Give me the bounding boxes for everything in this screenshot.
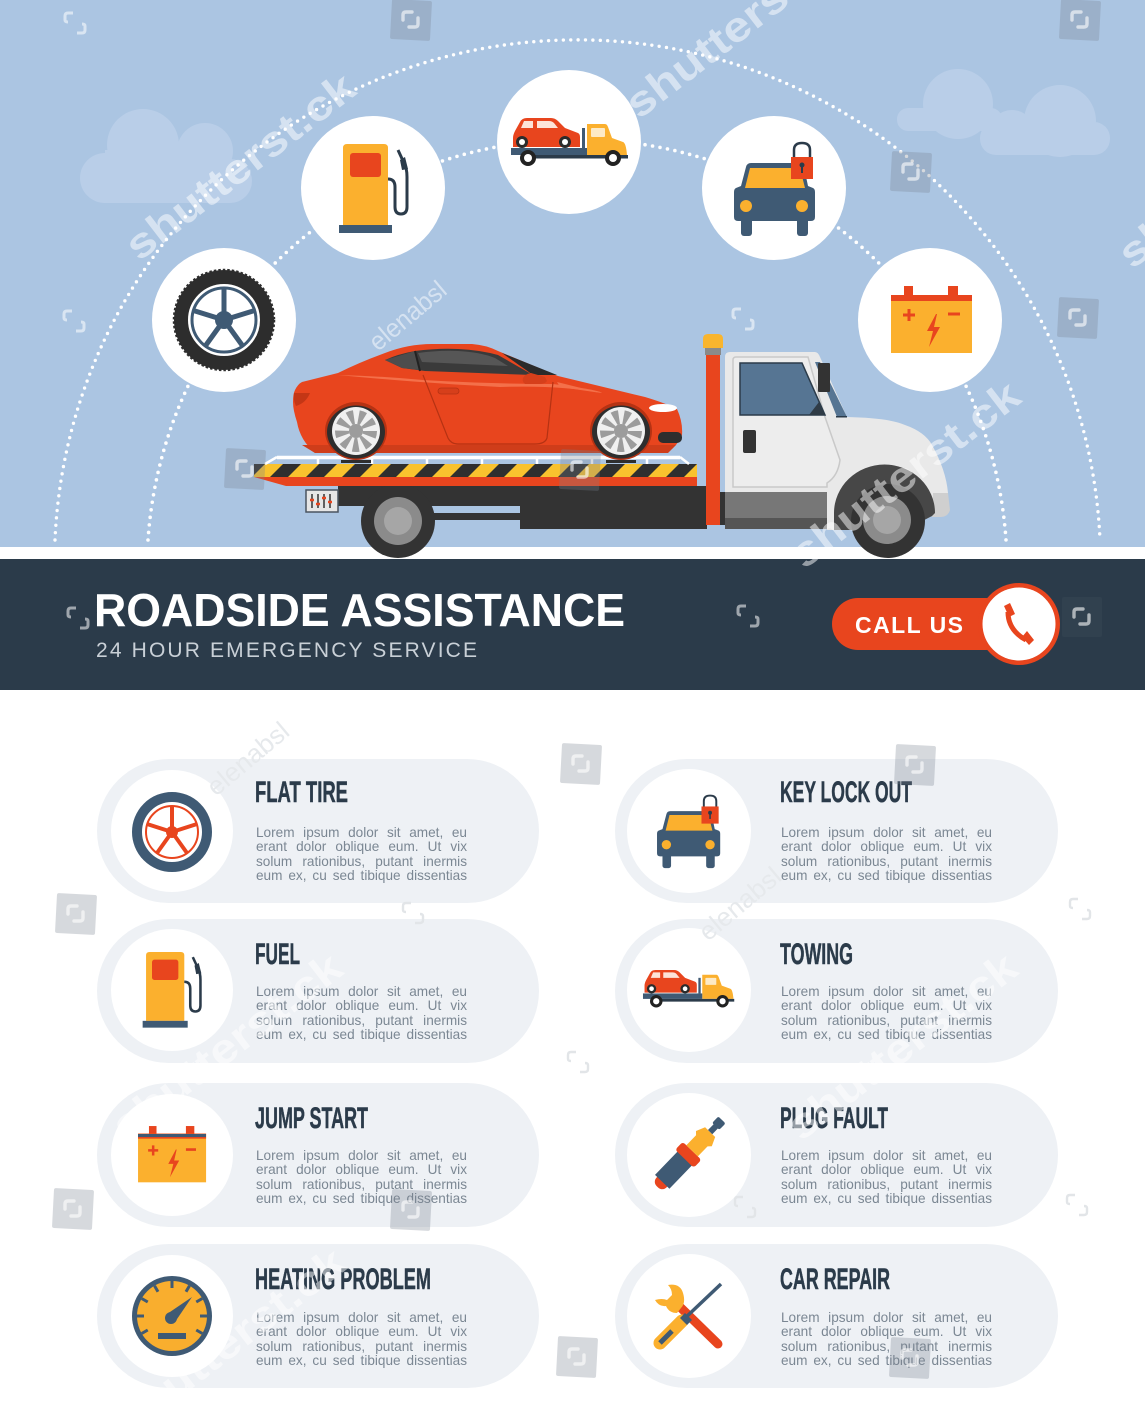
call us button [832,583,1060,665]
panel: jump start: erant dolor oblique eum. Ut vix [256,1162,467,1177]
panel: key lock out: KEY LOCK OUT [780,776,912,809]
watermarks: shutterst.ck [103,942,352,1149]
rear wheel [361,484,435,558]
panel: key lock out: solum rationibus, putant inermis [781,854,992,869]
panel: flat tire: solum rationibus, putant inermis [256,854,467,869]
call us button: CALL US [855,612,963,638]
panel: towing: erant dolor oblique eum. Ut vix [781,998,992,1013]
header band [0,559,1145,690]
panel: car repair: CAR REPAIR [780,1263,890,1296]
panel: fuel: solum rationibus, putant inermis [256,1013,467,1028]
panel: jump start: eum ex, cu sed tibique dissentias [256,1191,467,1206]
heading: ROADSIDE ASSISTANCE [94,584,625,636]
panel: key lock out: eum ex, cu sed tibique dissentias [781,868,992,883]
icon circle: key lock out [702,116,846,260]
panel: towing: solum rationibus, putant inermis [781,1013,992,1028]
panel: key lock out: erant dolor oblique eum. Ut vix [781,839,992,854]
clouds [80,69,1110,203]
panel: fuel: erant dolor oblique eum. Ut vix [256,998,467,1013]
icon: fuel pump [143,952,201,1028]
panel: heating problem [97,1244,539,1388]
watermarks: elenabsl [363,274,452,357]
red car [293,344,682,460]
panel: fuel: eum ex, cu sed tibique dissentias [256,1027,467,1042]
panel: car repair: erant dolor oblique eum. Ut vix [781,1324,992,1339]
panel: car repair: eum ex, cu sed tibique dissentias [781,1353,992,1368]
truck cab [725,352,950,530]
panel: towing: TOWING [780,938,853,971]
panel: key lock out [615,759,1058,903]
panel: towing [615,919,1058,1063]
panel: flat tire [97,759,539,903]
flatbed [254,457,697,486]
control box [306,490,338,512]
watermarks: shutterst.ck [116,62,365,269]
watermarks: elenabsl [693,861,787,947]
watermarks: shutterst.ck [778,942,1027,1149]
icon circle: towing [497,70,641,214]
panel: fuel [97,919,539,1063]
panel: fuel: FUEL [255,938,300,971]
panel: flat tire: eum ex, cu sed tibique dissentias [256,868,467,883]
panel: car repair [615,1244,1058,1388]
watermarks: elenabsl [201,716,295,802]
road strip [0,547,1145,559]
panel: plug fault: erant dolor oblique eum. Ut vix [781,1162,992,1177]
dotted arcs [55,40,1100,540]
panel: towing: eum ex, cu sed tibique dissentias [781,1027,992,1042]
watermarks: shutterst.ck [781,370,1030,577]
panel: plug fault [615,1083,1058,1227]
icon: gauge [132,1276,212,1356]
chassis [338,486,727,529]
icon: phone [1004,603,1034,645]
panel: heating problem: erant dolor oblique eum. Ut vix [256,1324,467,1339]
icon: car with lock [657,796,720,868]
icon: wheel [137,797,207,867]
panel: plug fault: eum ex, cu sed tibique dissentias [781,1191,992,1206]
panel: car repair: solum rationibus, putant inermis [781,1339,992,1354]
panel: jump start: solum rationibus, putant inermis [256,1177,467,1192]
tow truck with car [254,334,950,558]
panel: heating problem: HEATING PROBLEM [255,1263,431,1296]
icon: spark plug [648,1111,731,1196]
panel: plug fault: PLUG FAULT [780,1102,888,1135]
icon circle: tire [152,248,296,392]
panel: heating problem: eum ex, cu sed tibique dissentias [256,1353,467,1368]
icon: wrench and screwdriver [655,1284,721,1344]
sky background [0,0,1145,547]
panel: flat tire: FLAT TIRE [255,776,348,809]
front wheel [834,465,935,558]
icon: tow truck [643,970,734,1007]
panel: plug fault: solum rationibus, putant inermis [781,1177,992,1192]
panel: jump start: JUMP START [255,1102,368,1135]
icon circle: fuel [301,116,445,260]
subheading: 24 HOUR EMERGENCY SERVICE [96,639,477,662]
icon: battery [138,1126,206,1182]
icon circle: battery [858,248,1002,392]
panel: flat tire: erant dolor oblique eum. Ut vix [256,839,467,854]
panel: heating problem: solum rationibus, putant inermis [256,1339,467,1354]
red post and beacon [703,334,723,525]
panel: jump start [97,1083,539,1227]
